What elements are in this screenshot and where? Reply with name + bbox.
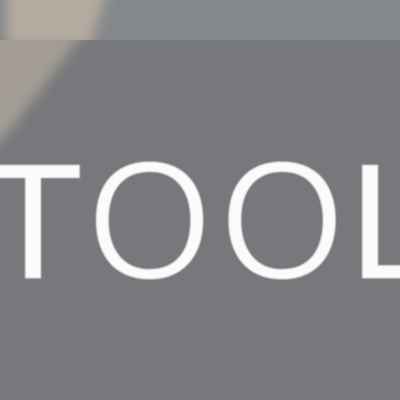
title word: TOOL: OO: [87, 126, 345, 316]
cropped poster graphic: [0, 0, 400, 280]
beige diagonal shape: top band: [7, 0, 110, 45]
top band: [0, 0, 400, 40]
beige diagonal shape: lower: [0, 40, 83, 148]
title word: TOOL: [0, 126, 400, 316]
